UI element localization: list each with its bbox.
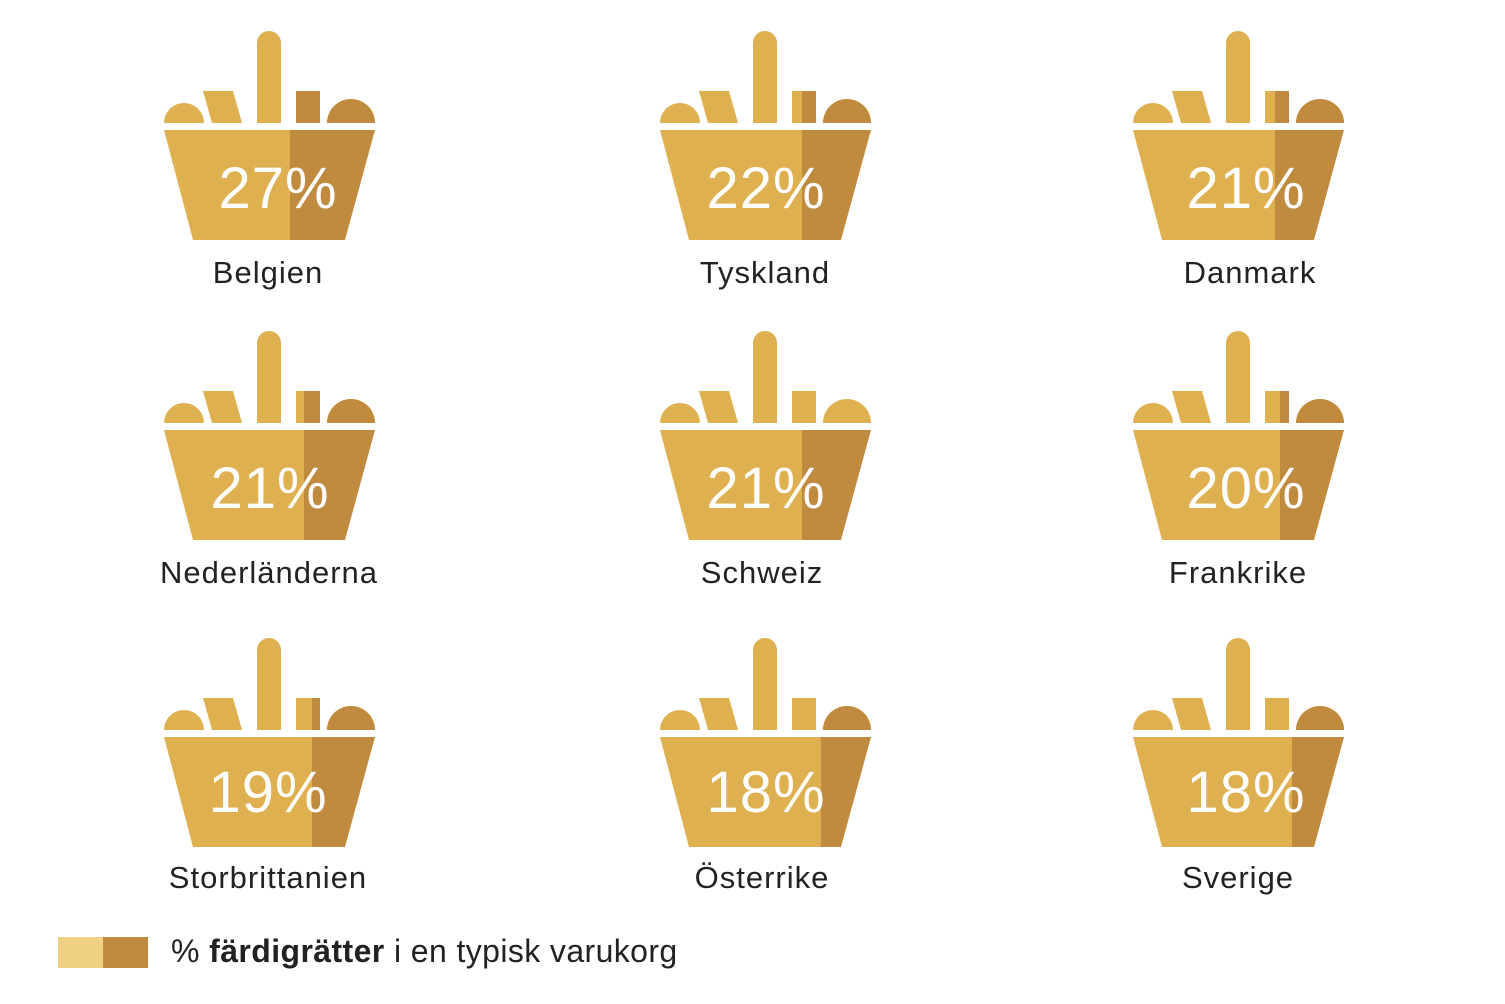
basket: Schweiz: 21%: [706, 456, 826, 521]
basket: Nederländerna: 21%: [210, 456, 330, 521]
basket: Belgien: 27%: [218, 156, 338, 221]
basket: Schweiz: Schweiz: [701, 555, 823, 590]
basket: Österrike: 18%: [706, 760, 826, 825]
basket: Danmark: 21%: [1186, 156, 1306, 221]
basket: Österrike: [660, 638, 871, 895]
basket: Sverige: Sverige: [1182, 860, 1294, 895]
basket: Sverige: 18%: [1186, 760, 1306, 825]
basket: Frankrike: 20%: [1186, 456, 1306, 521]
basket: Storbrittanien: Storbrittanien: [169, 860, 367, 895]
basket: Frankrike: [1133, 331, 1344, 590]
basket: Belgien: Belgien: [213, 255, 323, 290]
basket: Schweiz: [660, 331, 871, 590]
basket: Tyskland: Tyskland: [700, 255, 830, 290]
basket: Nederländerna: Nederländerna: [160, 555, 378, 590]
basket: Österrike: Österrike: [695, 860, 829, 895]
basket: Danmark: [1133, 31, 1344, 290]
basket: Sverige: [1133, 638, 1344, 895]
basket: Tyskland: 22%: [706, 156, 826, 221]
basket: Tyskland: [660, 31, 871, 290]
basket: Storbrittanien: [164, 638, 375, 895]
legend: % färdigrätter i en typisk varukorg: [171, 933, 678, 969]
basket: Danmark: Danmark: [1184, 255, 1316, 290]
basket: Storbrittanien: 19%: [208, 760, 328, 825]
basket: Belgien: [164, 31, 375, 290]
basket: Nederländerna: [160, 331, 378, 590]
basket: Frankrike: Frankrike: [1169, 555, 1307, 590]
